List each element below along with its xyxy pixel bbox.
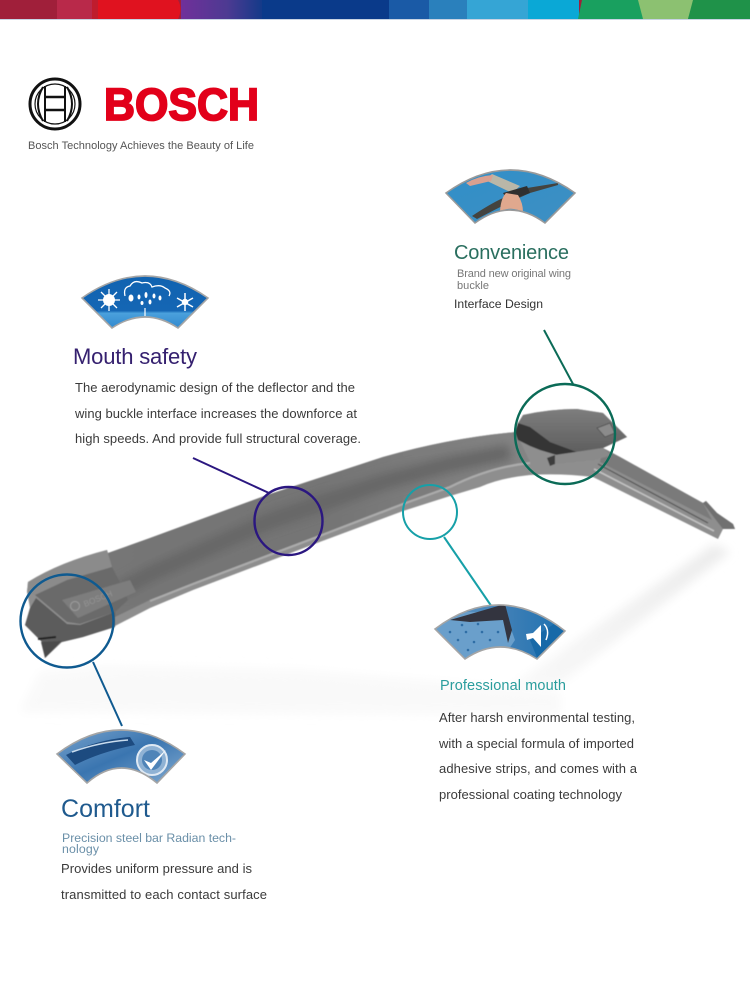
blade silhouette [25,409,735,658]
mute symbol [526,625,541,647]
text: comfort subheading [62,831,236,856]
text: comfort subheading: Precision steel bar Radian tech- [62,831,236,845]
lower connector [555,448,612,464]
dark mechanism [515,423,577,456]
tab [597,423,615,437]
light line on lower edge [150,463,530,601]
text: mouth safety description [74,380,361,446]
text: mouth safety description: high speeds. And provide full structural coverage. [75,431,361,446]
left cap front face [25,598,115,643]
tail end clip [703,501,735,529]
heading: comfort: Comfort [61,795,150,823]
text: convenience description: buckle [457,280,489,292]
sun [98,289,120,311]
heading: convenience: Convenience [454,242,569,264]
wiper blade [25,409,735,658]
main arm [108,432,530,618]
text: professional mouth description: professional coating technology [439,787,622,802]
embossed model number: BOSCH [82,588,114,609]
text: interface design: Interface Design [454,297,543,311]
text: convenience description [457,268,571,292]
marker: mouth safety [193,458,322,555]
text: comfort description: transmitted to each contact surface [61,887,267,902]
icon: silent coating [434,604,566,660]
tagline: Bosch Technology Achieves the Beauty of Life [28,140,254,152]
text: mouth safety description: The aerodynamic design of the deflector and the [75,380,355,395]
text: professional mouth description: with a special formula of imported [438,736,634,751]
right cap top [518,409,627,452]
Bosch logo [30,79,259,130]
marker: professional mouth [403,485,492,607]
icon: Bosch armature [30,79,80,129]
logo plate [62,580,136,618]
text: comfort description: Provides uniform pressure and is [61,861,252,876]
text: professional mouth description: adhesive strips, and comes with a [439,761,638,776]
water droplets [449,623,499,651]
check badge [137,745,167,775]
text: mouth safety description: wing buckle interface increases the downforce at [74,406,357,421]
top colour bar [0,0,750,20]
text: professional mouth description [438,710,638,802]
left end bump [27,550,112,595]
icon: hands fitting wiper [444,169,576,224]
marker: convenience [515,330,615,484]
snowflake [177,293,193,311]
text: comfort description [61,861,267,902]
left blade tip [41,641,62,658]
marker: comfort [20,574,122,726]
darker centre band of arm [120,452,510,590]
left cap top face [35,567,128,624]
text: comfort subheading: nology [62,842,100,856]
wordmark: BOSCH [104,79,259,130]
text: professional mouth description: After harsh environmental testing, [439,710,635,725]
wiper reflection [20,544,730,715]
text: convenience description: Brand new original wing [457,268,571,280]
heading: professional mouth: Professional mouth [440,678,566,694]
tail bands [600,448,712,520]
icon: comfort check [56,729,186,784]
icon: all weather [80,275,210,329]
cloud and rain [125,282,170,296]
heading: mouth safety: Mouth safety [73,344,197,369]
